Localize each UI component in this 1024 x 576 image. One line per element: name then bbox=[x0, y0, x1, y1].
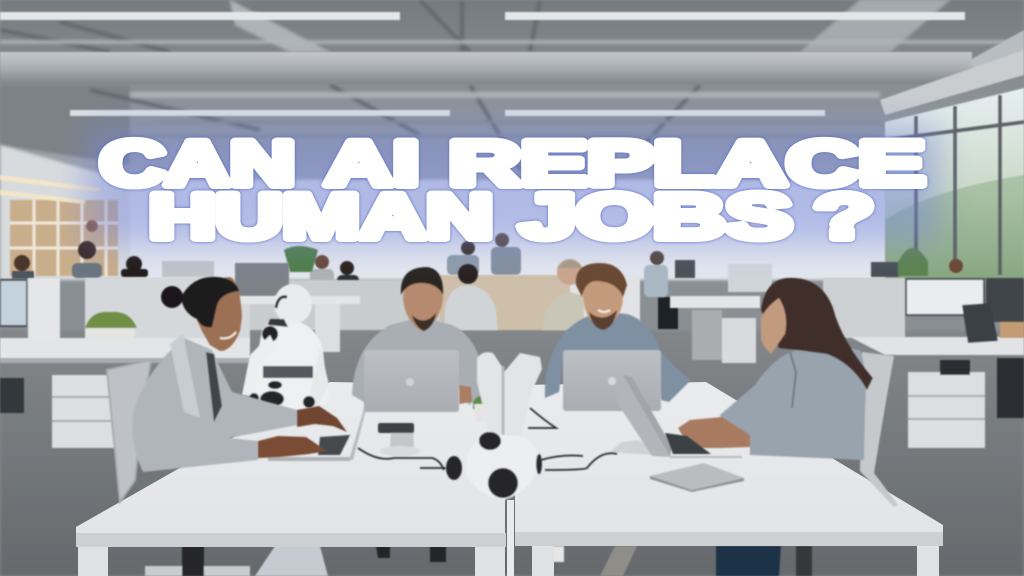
robot: background humanoid bbox=[242, 284, 329, 410]
legs and chairs under table bbox=[145, 546, 812, 576]
line two: HUMAN JOBS ?: ? bbox=[814, 182, 874, 252]
robot: foreground on table bbox=[446, 352, 542, 500]
title bbox=[100, 129, 925, 252]
hands: left woman's lower hand bbox=[258, 436, 327, 458]
small desk plant bbox=[473, 396, 488, 422]
background workers bbox=[12, 233, 963, 329]
line two: HUMAN JOBS ?: HUMAN bbox=[149, 182, 493, 252]
person: man at far desk bbox=[444, 259, 584, 330]
person: woman in grey blazer bbox=[107, 277, 347, 502]
notebook on table bbox=[650, 463, 744, 492]
title haze bbox=[85, 125, 940, 245]
line one: CAN AI REPLACE: CAN bbox=[100, 129, 295, 199]
line one: CAN AI REPLACE bbox=[100, 129, 925, 199]
person: long-haired woman in grey jacket bbox=[678, 278, 898, 507]
laptop: right woman's bbox=[610, 375, 742, 458]
line one: CAN AI REPLACE: REPLACE bbox=[449, 129, 925, 199]
window wall bbox=[885, 88, 1024, 285]
line two: HUMAN JOBS ?: JOBS bbox=[520, 182, 792, 252]
cables on table bbox=[358, 408, 617, 470]
front tables bbox=[76, 382, 943, 576]
person: smiling bearded man bbox=[545, 263, 691, 402]
laptop: left woman's bbox=[268, 388, 371, 461]
wooden shelving bbox=[0, 175, 118, 276]
phone on charging stand bbox=[378, 423, 420, 456]
person: man in grey shirt bbox=[352, 267, 487, 405]
laptops: rear pair bbox=[364, 350, 661, 412]
line two: HUMAN JOBS ? bbox=[149, 182, 874, 252]
ceiling light strips bbox=[0, 12, 1024, 116]
ceiling duct bbox=[0, 52, 972, 84]
line one: CAN AI REPLACE: AI bbox=[325, 129, 419, 199]
back desks, partitions and monitors bbox=[0, 248, 1024, 448]
